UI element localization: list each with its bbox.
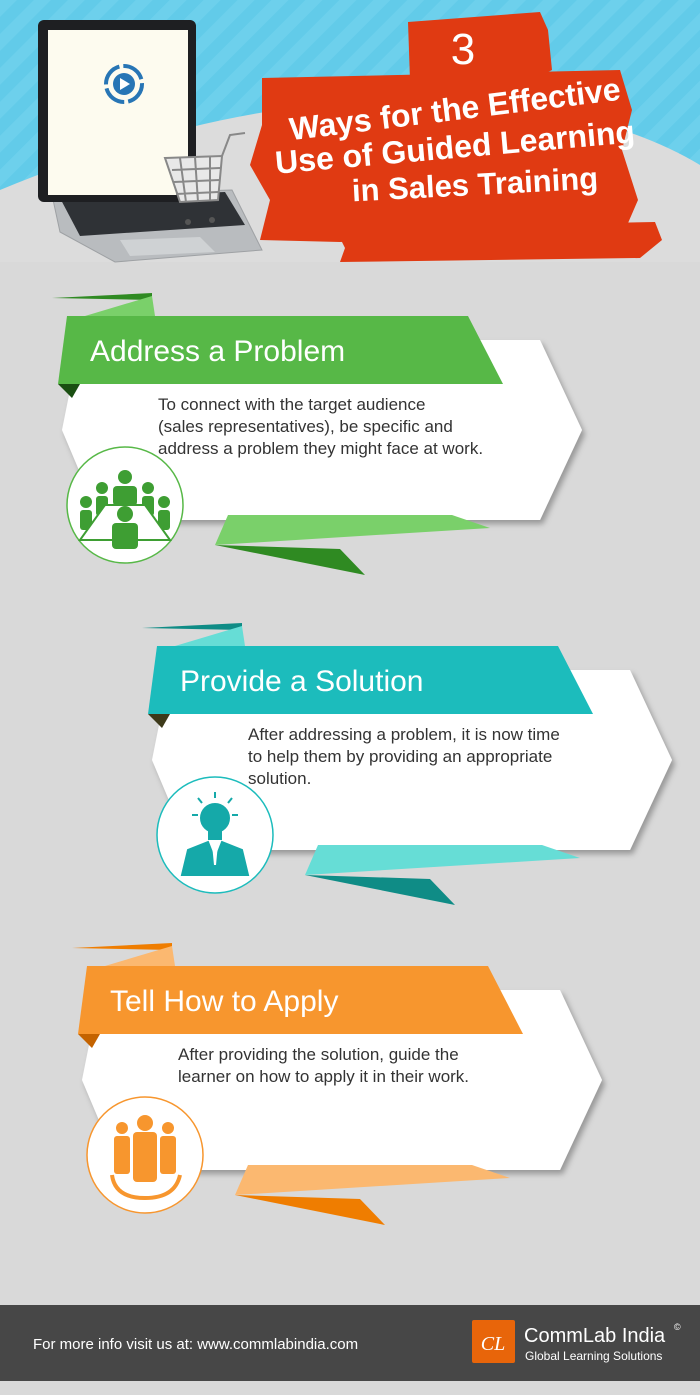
footer (0, 1305, 700, 1381)
title text: Ways for the Effective (287, 71, 622, 147)
logo: CL (481, 1333, 505, 1355)
panel: address a problem (52, 293, 582, 575)
body text: address a problem they might face at work. (158, 439, 483, 458)
green ribbon heading: Address a Problem (90, 335, 345, 368)
icon: laptop with cart (38, 20, 262, 262)
bottom ribbon (235, 1165, 510, 1225)
body text: After providing the solution, guide the (178, 1045, 459, 1064)
title: red scribble banner (250, 12, 662, 262)
footer text: For more info visit us at: www.commlabindia.com (33, 1336, 358, 1353)
icon: team cycle (87, 1097, 203, 1213)
bottom ribbon (305, 845, 580, 905)
title text: Use of Guided Learning (274, 113, 636, 181)
body text: (sales representatives), be specific and (158, 417, 453, 436)
body text (248, 725, 560, 788)
logo: © (674, 1322, 681, 1332)
teal ribbon heading (142, 623, 593, 728)
teal ribbon heading: Provide a Solution (180, 665, 424, 698)
body text: To connect with the target audience (158, 395, 425, 414)
logo: CommLab India (524, 1325, 666, 1347)
orange ribbon heading: Tell How to Apply (110, 985, 338, 1018)
logo (472, 1320, 681, 1363)
header background (0, 0, 700, 262)
icon: meeting table people (67, 447, 183, 563)
white hexagon card (82, 990, 602, 1170)
title text (274, 25, 636, 208)
bottom ribbon (215, 515, 490, 575)
green ribbon heading (52, 293, 503, 398)
body text: solution. (248, 769, 311, 788)
title text: in Sales Training (351, 161, 599, 208)
body text (158, 395, 483, 458)
icon: lightbulb businessman (157, 777, 273, 893)
body text (178, 1045, 469, 1086)
logo: Global Learning Solutions (525, 1349, 662, 1363)
white hexagon card (152, 670, 672, 850)
body text: After addressing a problem, it is now time (248, 725, 560, 744)
panel: tell how to apply (72, 943, 602, 1225)
body text: to help them by providing an appropriate (248, 747, 552, 766)
title text: 3 (451, 25, 475, 74)
body text: learner on how to apply it in their work. (178, 1067, 469, 1086)
panel: provide a solution (142, 623, 672, 905)
orange ribbon heading (72, 943, 523, 1048)
white hexagon card (62, 340, 582, 520)
